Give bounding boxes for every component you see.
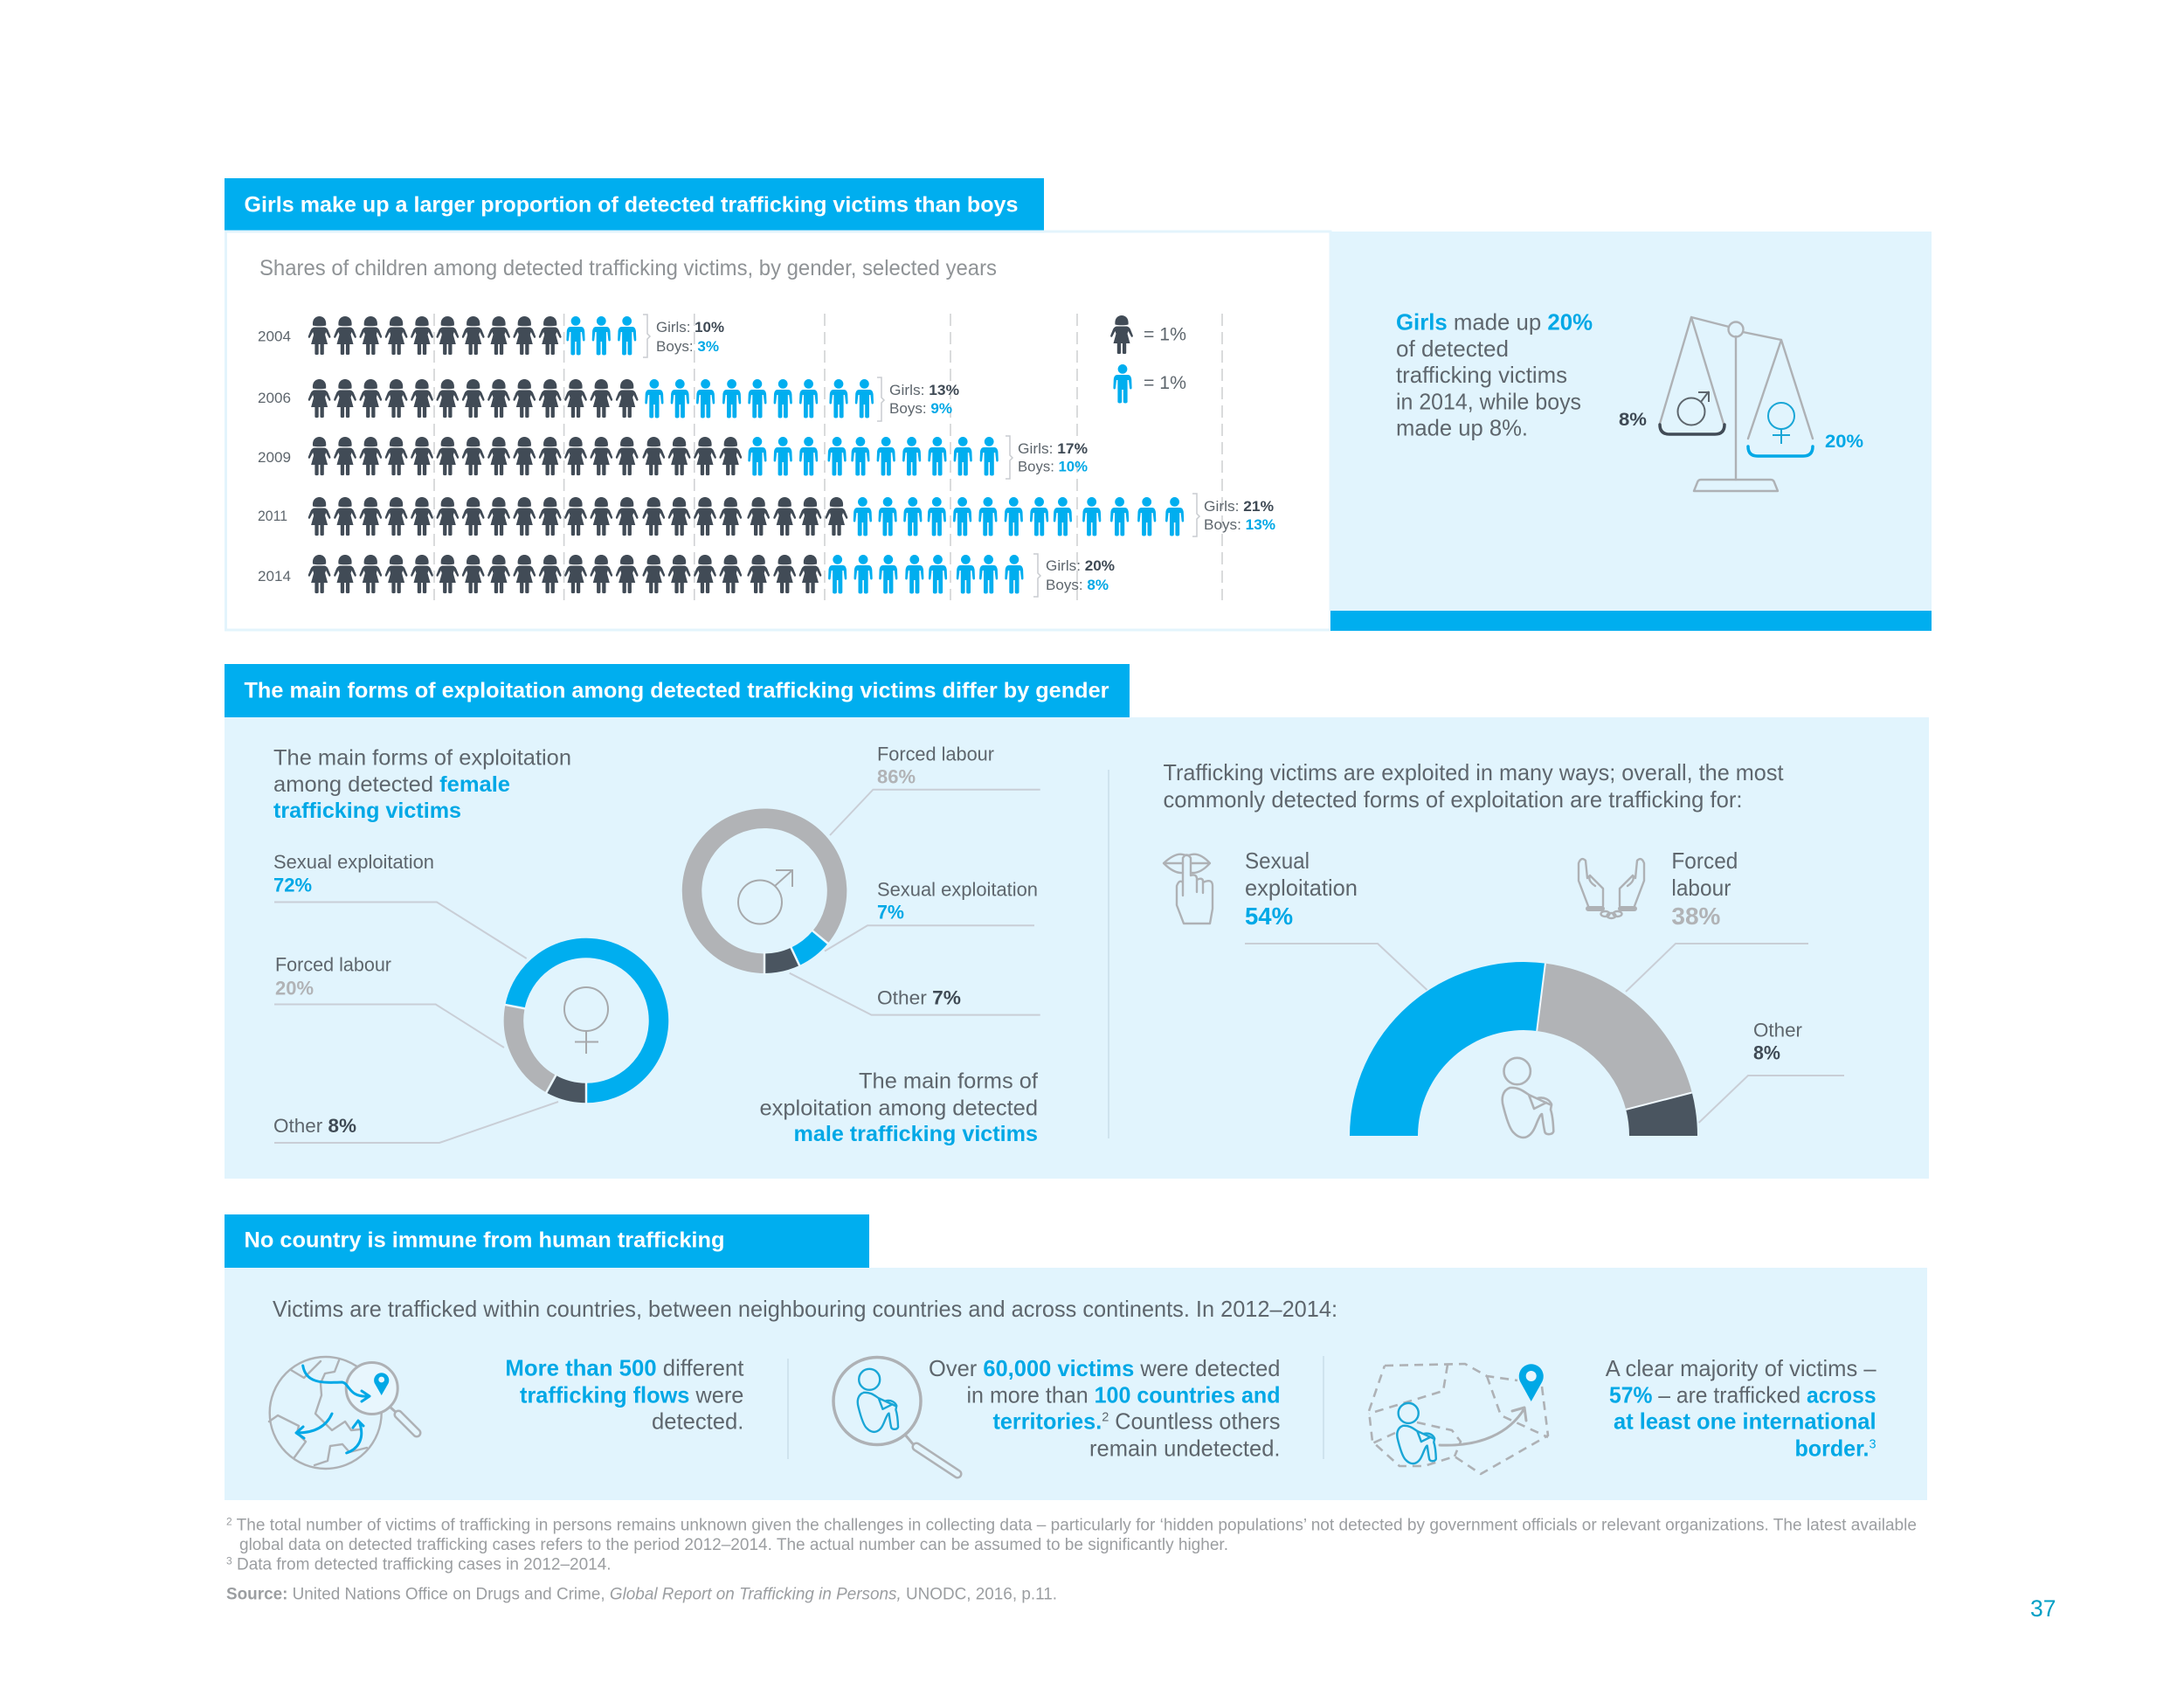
legend <box>1110 315 1186 404</box>
label: forced labour: 38% <box>1671 903 1720 930</box>
label: sexual exploitation: 54% <box>1245 903 1293 930</box>
page number: 37 <box>2030 1595 2056 1622</box>
row 2006: Boys: 9% <box>889 400 952 417</box>
2014 statement: in 2014, while boys <box>1396 388 1581 414</box>
text: 57 percent: at least one international <box>1614 1408 1876 1435</box>
section 1 heading: Girls make up a larger proportion of detected trafficking victims than boys <box>245 192 1019 217</box>
section 2: forms of exploitation <box>225 664 1929 1179</box>
female labels and leader lines: 20% <box>275 977 314 1000</box>
text: 60,000 victims: territories. <box>992 1408 1102 1435</box>
chart: female donut <box>504 948 659 1104</box>
male caption <box>760 1069 1038 1146</box>
icon: seated victim <box>1503 1058 1553 1138</box>
footnotes: The total number of victims of trafficking in persons remains unknown given the challenges in collecting data – particularly for ‘hidden populations’ not detected by government officials or relevant organizations. The latest available <box>232 1517 1917 1535</box>
row 2004: Boys: 3% <box>656 338 719 355</box>
text: 60,000 victims: Countless others <box>1109 1408 1281 1435</box>
row 2011: Boys: 13% <box>1204 516 1275 533</box>
male labels and leader lines <box>790 743 1040 1015</box>
text: 57 percent: border. <box>1794 1435 1869 1461</box>
icon: balance scale: 20% <box>1825 432 1863 452</box>
footnotes: 2 <box>226 1516 232 1528</box>
male labels and leader lines: Forced labour <box>877 743 994 765</box>
row 2006: 2006 <box>258 390 291 406</box>
row 2014: Boys: 8% <box>1046 577 1109 593</box>
section 1 heading <box>225 178 1044 232</box>
female intro text: trafficking victims <box>273 799 461 823</box>
female labels and leader lines: 72% <box>273 874 312 896</box>
row 2011: Girls: 21% <box>1204 498 1274 515</box>
icon: balance scale: 8% <box>1619 410 1647 430</box>
female labels and leader lines: Other 8% <box>273 1115 356 1137</box>
row 2009: Boys: 10% <box>1018 458 1088 475</box>
panel: pictogram chart <box>225 232 1330 630</box>
icon: female symbol <box>564 987 608 1054</box>
male caption: exploitation among detected <box>760 1096 1038 1120</box>
icon: map with route <box>1369 1364 1548 1474</box>
row 2009 <box>258 436 1088 479</box>
text: 57 percent: 3 <box>1869 1436 1876 1452</box>
male caption: male trafficking victims <box>793 1122 1038 1146</box>
label: forced labour: labour <box>1671 875 1731 901</box>
icon: chained hands <box>1579 859 1644 918</box>
label: forced labour <box>1626 847 1808 992</box>
text: 500 flows <box>505 1354 744 1435</box>
section 3 heading: No country is immune from human trafficking <box>245 1228 725 1253</box>
row 2004: 2004 <box>258 329 291 344</box>
footnotes <box>226 1516 1917 1604</box>
row 2006: Girls: 13% <box>889 382 959 398</box>
row 2014: 2014 <box>258 568 291 585</box>
row 2009: Girls: 17% <box>1018 440 1088 457</box>
intro sentence: Victims are trafficked within countries, between neighbouring countries and across continents. In 2012–2014: <box>273 1296 1337 1322</box>
section 3: no country is immune <box>225 1214 1927 1500</box>
female labels and leader lines <box>273 851 558 1143</box>
label: sexual exploitation <box>1245 847 1427 990</box>
2014 statement: of detected <box>1396 336 1509 362</box>
female intro text: The main forms of exploitation <box>273 746 571 771</box>
row 2011: 2011 <box>258 508 287 524</box>
text: 500 flows: More than 500 different <box>505 1354 744 1380</box>
text: 57 percent <box>1606 1355 1876 1461</box>
text: 57 percent: 57% – are trafficked across <box>1609 1382 1876 1408</box>
row 2004: Girls: 10% <box>656 319 724 336</box>
label: other <box>1699 1020 1844 1123</box>
female intro text: among detected female <box>273 772 510 797</box>
label: other: Other <box>1753 1020 1802 1041</box>
legend: = 1% <box>1144 373 1186 393</box>
panel: flows <box>225 1268 1927 1500</box>
male labels and leader lines: 7% <box>877 902 904 924</box>
male labels and leader lines: Other 7% <box>877 987 961 1008</box>
overall intro text: Trafficking victims are exploited in many ways; overall, the most <box>1164 759 1784 785</box>
text: 60,000 victims <box>929 1355 1281 1461</box>
text: 60,000 victims: Over 60,000 victims were detected <box>929 1355 1281 1381</box>
section 2 heading <box>225 664 1130 717</box>
label: forced labour: Forced <box>1671 847 1738 874</box>
text: 60,000 victims: 2 <box>1102 1410 1109 1424</box>
text: 60,000 victims: remain undetected. <box>1089 1435 1281 1461</box>
legend: = 1% <box>1144 325 1186 344</box>
row 2009: 2009 <box>258 449 291 466</box>
footnotes: global data on detected trafficking cases refers to the period 2012–2014. The actual number can be assumed to be significantly higher. <box>239 1536 1228 1554</box>
footnotes: Data from detected trafficking cases in 2012–2014. <box>232 1556 612 1574</box>
male labels and leader lines: Sexual exploitation <box>877 879 1038 900</box>
overall intro text <box>1164 759 1784 813</box>
female labels and leader lines: Sexual exploitation <box>273 851 434 873</box>
row 2006 <box>258 377 959 421</box>
row 2011 <box>258 494 1275 536</box>
chart: male donut <box>692 819 837 975</box>
female labels and leader lines: Forced labour <box>275 954 391 976</box>
source line: Source: United Nations Office on Drugs and Crime, Global Report on Trafficking in Persons, UNODC, 2016, p.11. <box>226 1586 1057 1604</box>
row 2014 <box>258 554 1115 597</box>
icon: magnifier over victim <box>833 1358 957 1474</box>
2014 statement: trafficking victims <box>1396 362 1567 388</box>
2014 statement: made up 8%. <box>1396 414 1528 440</box>
footnotes: 3 <box>226 1555 232 1567</box>
2014 statement: Girls made up 20% <box>1396 309 1593 336</box>
chart: overall semi-donut <box>1350 962 1697 1136</box>
section 1: girls vs boys <box>225 178 1932 631</box>
section 3 heading <box>225 1214 869 1268</box>
male caption: The main forms of <box>859 1069 1038 1094</box>
male labels and leader lines: 86% <box>877 765 916 788</box>
panel: 2014 scales <box>1330 232 1932 631</box>
female intro text <box>273 746 571 823</box>
icon: finger on lips <box>1164 854 1213 924</box>
text: 60,000 victims: in more than 100 countries and <box>966 1382 1281 1408</box>
chart subtitle: Shares of children among detected trafficking victims, by gender, selected years <box>259 256 997 280</box>
section 2 heading: The main forms of exploitation among detected trafficking victims differ by gender <box>245 678 1109 702</box>
icon: balance scale <box>1619 317 1863 491</box>
gridlines <box>434 314 1222 600</box>
label: other: 8% <box>1753 1042 1780 1064</box>
label: sexual exploitation: exploitation <box>1245 875 1358 901</box>
text: 57 percent: A clear majority of victims – <box>1606 1355 1876 1381</box>
icon: male symbol <box>738 870 792 924</box>
2014 statement <box>1396 309 1593 440</box>
row 2014: Girls: 20% <box>1046 557 1115 574</box>
icon: globe with magnifier <box>269 1357 417 1469</box>
panel: exploitation <box>225 717 1929 1179</box>
text: 500 flows: trafficking flows were <box>520 1382 743 1408</box>
text: 500 flows: detected. <box>652 1408 743 1435</box>
row 2004 <box>258 315 724 357</box>
overall intro text: commonly detected forms of exploitation are trafficking for: <box>1164 786 1742 813</box>
label: sexual exploitation: Sexual <box>1245 847 1310 874</box>
